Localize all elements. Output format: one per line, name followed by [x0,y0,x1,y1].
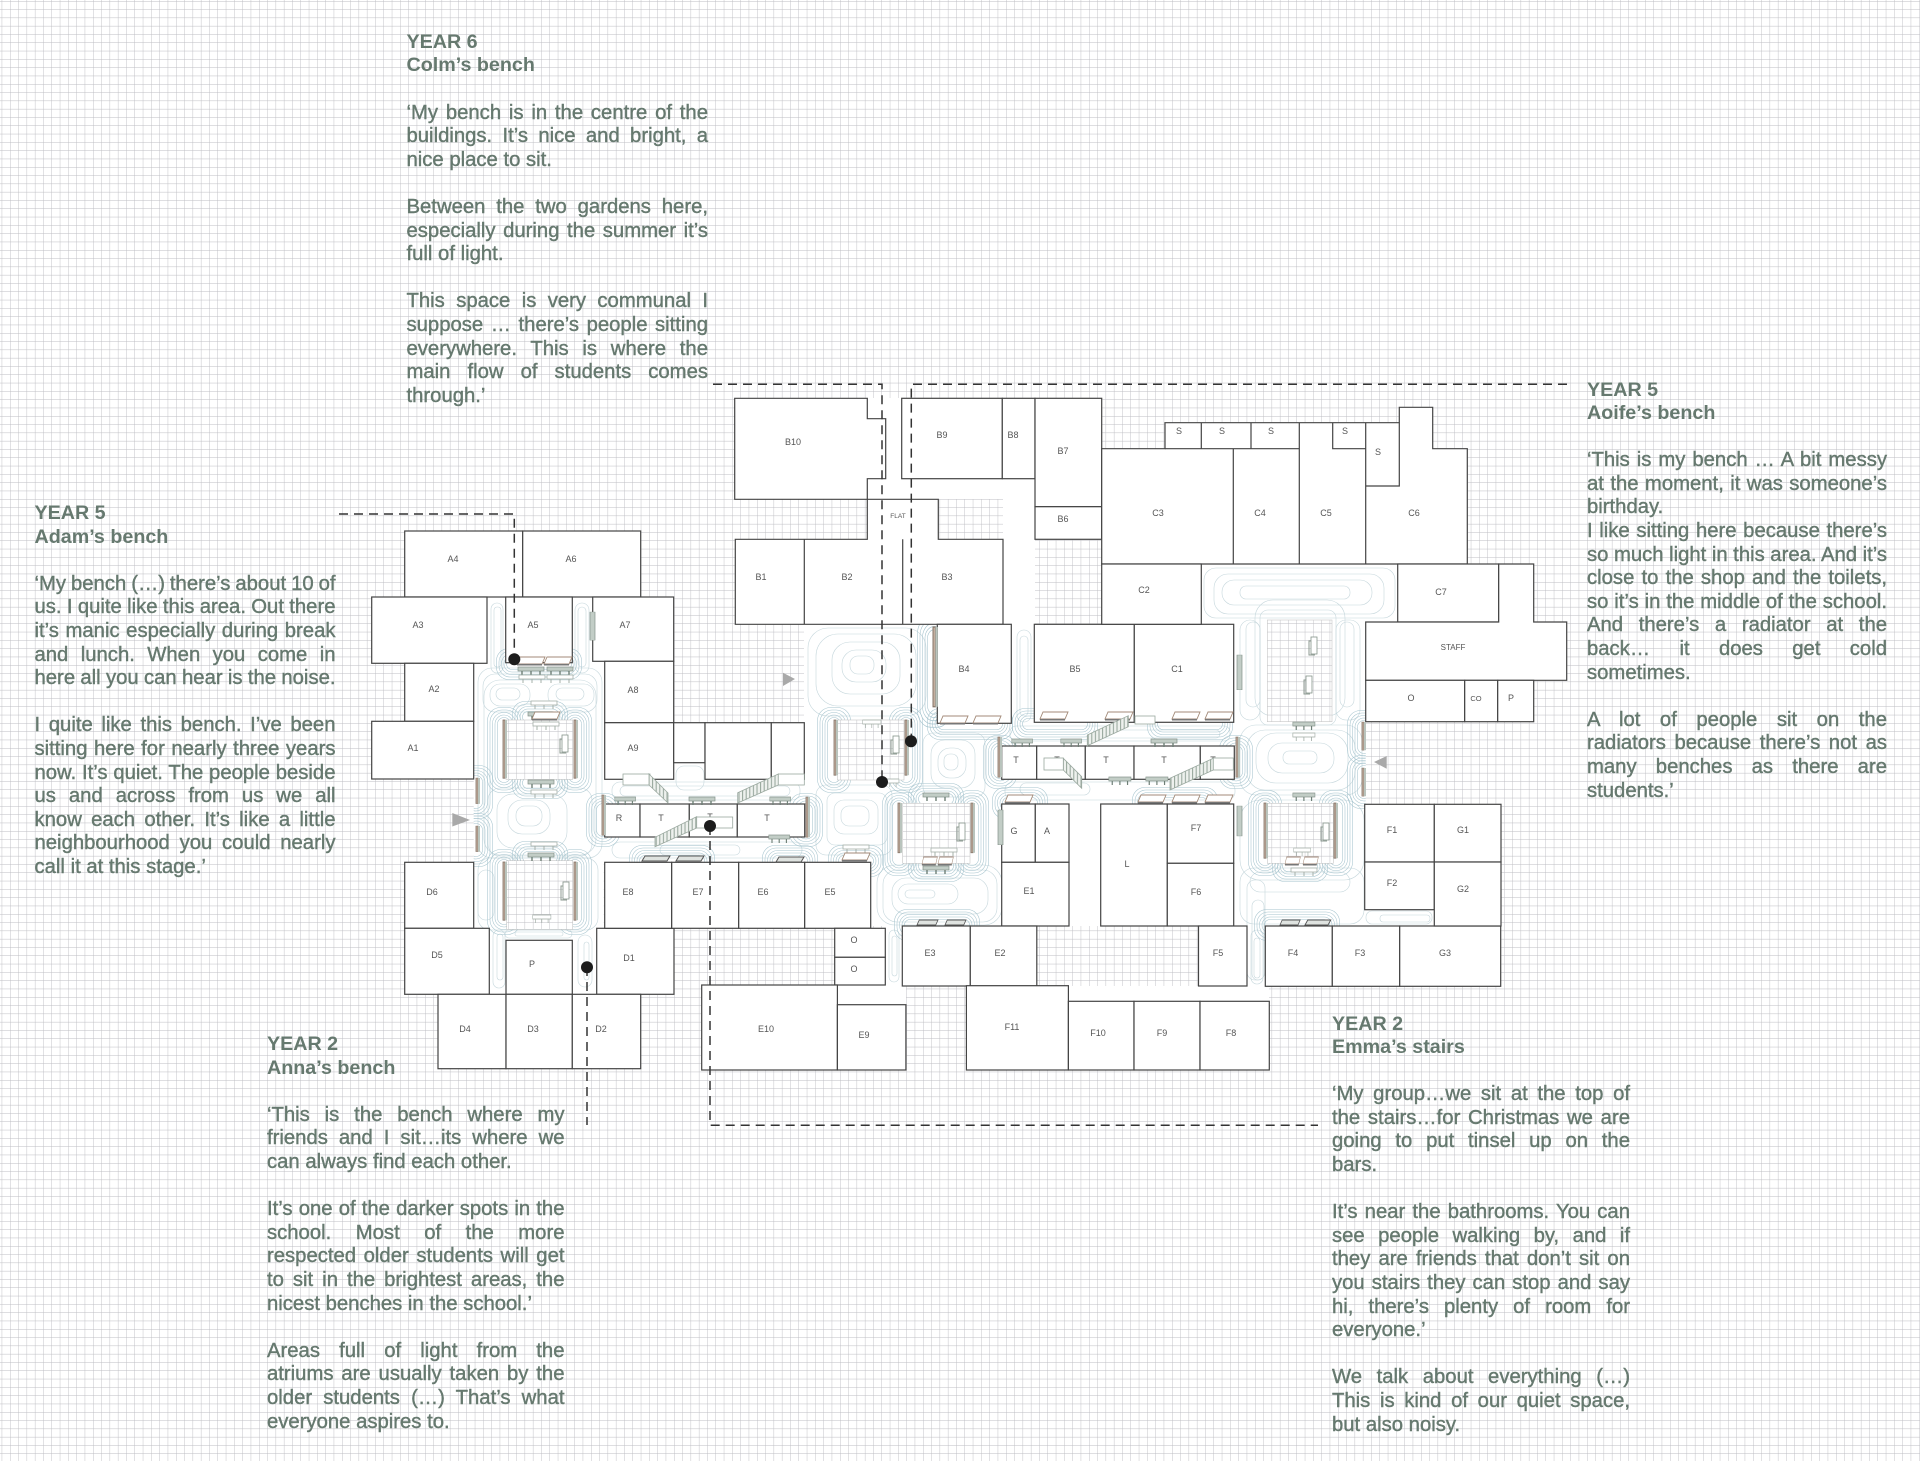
text block: Colm's bench: nice place to sit. [406,149,552,171]
text block: Emma's stairs: the stairs…for Christmas we are [1332,1107,1630,1129]
room labels: A4 [447,554,459,564]
room labels: A6 [565,554,577,564]
room labels: S [1342,426,1348,436]
location dots [508,653,917,973]
rooms: central teaching rows [605,746,1234,926]
room labels: D2 [595,1024,607,1034]
movement contour lines [460,568,1432,988]
room labels: F11 [1005,1022,1019,1032]
text block: Adam's bench: know each other. It’s like a little [34,809,336,831]
text block: Aoife's bench: ‘This is my bench … A bit messy [1587,449,1887,471]
text block: Adam's bench: call it at this stage.’ [34,856,206,878]
text block: Emma's stairs: going to put tinsel up on the [1332,1130,1630,1152]
rooms: A wing [372,531,804,779]
room labels: A3 [412,620,424,630]
room labels: F5 [1213,948,1223,958]
room labels: A1 [407,743,419,753]
text block: Adam's bench: sitting here for nearly three years [34,738,336,760]
room labels: A5 [527,620,539,630]
text block: Anna's bench: respected older students will get [267,1245,564,1267]
text block: Adam's bench: and lunch. When you come in [34,644,336,666]
room labels: T [1013,755,1019,765]
text block: Aoife's bench: back… it does get cold [1587,638,1887,660]
room labels: F6 [1191,887,1201,897]
room labels: G1 [1457,825,1469,835]
text block: Aoife's bench: so much light in this area. And it’s [1587,544,1887,566]
courtyard gardens [506,620,1333,929]
text block: Colm's bench: This space is very communal I [406,290,708,312]
room labels: B10 [785,437,801,447]
text block: Emma's stairs: you stairs they can stop and say [1332,1272,1630,1294]
room labels: A2 [428,684,440,694]
room labels: B5 [1069,664,1081,674]
text block: Aoife's bench: sometimes. [1587,662,1691,684]
text block: Colm's bench: everywhere. This is where the [406,338,708,360]
room labels: T [707,812,713,822]
text block: Anna's bench [266,1033,565,1432]
text block: Colm's bench: through.’ [406,385,485,407]
room labels: E2 [994,948,1006,958]
room labels: T [1054,755,1060,765]
text block: Aoife's bench: many benches as there are [1587,756,1887,778]
text block: Adam's bench: us. I quite like this area. Out there [34,596,336,618]
text block: Colm's bench: full of light. [406,243,503,265]
text block: Aoife's bench: I like sitting here because there’s [1587,520,1887,542]
room labels: B4 [958,664,970,674]
text block: Emma's stairs: but also noisy. [1332,1414,1460,1436]
text block: Colm's bench: YEAR 6 [406,31,478,53]
room labels: S [1176,426,1182,436]
room labels: F10 [1090,1028,1106,1038]
text block: Colm's bench: ‘My bench is in the centre of the [406,102,708,124]
text block: Colm's bench: Colm’s bench [406,54,535,76]
room labels: FLAT [890,513,906,520]
rooms: B wing and flat [735,398,1234,723]
room labels: E7 [692,887,704,897]
room labels: S [1219,426,1225,436]
room labels: C2 [1138,585,1150,595]
room labels: E6 [757,887,769,897]
room labels: A [1044,826,1050,836]
text block: Emma's stairs: everyone.’ [1332,1319,1426,1341]
room labels: T [1210,755,1216,765]
text block: Emma's stairs: It’s near the bathrooms. You can [1332,1201,1630,1223]
dashed leader lines [339,384,1567,1125]
text block: Emma's stairs: ‘My group…we sit at the top of [1332,1083,1630,1105]
room labels: T [1161,755,1167,765]
room labels: E3 [924,948,936,958]
room labels: F8 [1226,1028,1236,1038]
text block: Adam's bench [34,502,336,878]
room labels: C3 [1152,508,1164,518]
room labels: G3 [1439,948,1451,958]
room labels: E9 [858,1030,870,1040]
text block: Colm's bench: buildings. It’s nice and bright, a [406,125,708,147]
room labels: D6 [426,887,438,897]
text block: Emma's stairs: YEAR 2 [1332,1012,1403,1034]
room labels: T [658,813,664,823]
text block: Emma's stairs [1332,1012,1630,1436]
room labels: B3 [941,572,953,582]
text block: Anna's bench: ‘This is the bench where my [267,1104,564,1126]
room labels: E1 [1023,886,1035,896]
room labels: C7 [1435,587,1447,597]
text block: Aoife's bench: YEAR 5 [1587,378,1658,400]
text block: Anna's bench: Areas full of light from the [267,1340,564,1362]
text block: Colm's bench: Between the two gardens here, [406,196,708,218]
text block: Emma's stairs: Emma’s stairs [1332,1036,1465,1058]
text block: Anna's bench: school. Most of the more [267,1222,564,1244]
room labels: B1 [755,572,767,582]
room labels: A9 [627,743,639,753]
text block: Colm's bench: suppose … there’s people sitting [406,314,708,336]
room labels: D1 [623,953,635,963]
room labels: F3 [1355,948,1365,958]
room labels: F2 [1387,878,1397,888]
room labels: P [529,959,535,969]
room labels: G [1010,826,1018,836]
room labels: A8 [627,685,639,695]
text block: Adam's bench: now. It’s quiet. The people beside [34,762,336,784]
text block: Anna's bench: YEAR 2 [267,1033,338,1055]
text block: Emma's stairs: they are friends that don’t sit on [1332,1248,1630,1270]
text block: Aoife's bench: birthday. [1587,496,1663,518]
room labels: E5 [824,887,836,897]
text block: Adam's bench: here all you can hear is the noise. [34,667,336,689]
room labels: F7 [1191,823,1201,833]
room labels: CO [1470,694,1482,703]
text block: Anna's bench: friends and I sit…its where we [267,1127,564,1149]
room labels: O [850,964,858,974]
room labels: D3 [527,1024,539,1034]
room labels: L [1124,859,1130,869]
text block: Emma's stairs: hi, there’s plenty of room for [1332,1296,1630,1318]
room labels: F9 [1157,1028,1167,1038]
room labels: A7 [619,620,631,630]
room labels: T [1103,755,1109,765]
text block: Adam's bench: YEAR 5 [34,502,106,524]
text block: Adam's bench: Adam’s bench [34,526,168,548]
text block: Colm's bench [406,31,708,407]
entrance arrows [452,673,1387,826]
text block: Anna's bench: can always find each other. [267,1151,512,1173]
circulation floor [474,398,1434,1005]
room labels: D5 [431,950,443,960]
text block: Adam's bench: it’s manic especially during break [34,620,336,642]
room labels: O [850,935,858,945]
text block: Anna's bench: atriums are usually taken by the [267,1363,564,1385]
benches: vertical [476,612,1366,920]
room labels: F4 [1288,948,1298,958]
text block: Emma's stairs: We talk about everything (…) [1332,1366,1630,1388]
text block: Adam's bench: ‘My bench (…) there’s about 10 of [34,573,336,595]
text block: Aoife's bench: And there’s a radiator at the [1587,614,1887,636]
room labels [407,426,1514,1040]
text block: Anna's bench: Anna’s bench [267,1057,395,1079]
stairs [623,716,1233,847]
room labels: B8 [1007,430,1019,440]
text block: Adam's bench: neighbourhood you could nearly [34,832,336,854]
room labels: E8 [622,887,634,897]
room labels: E10 [758,1024,774,1034]
text block: Anna's bench: to sit in the brightest areas, the [267,1269,564,1291]
text block: Aoife's bench: close to the shop and the toilets, [1587,567,1887,589]
room labels: O [1407,693,1415,703]
text block: Colm's bench: especially during the summer it’s [406,220,708,242]
text block: Aoife's bench: at the moment, it was someone’s [1587,473,1887,495]
room labels: B7 [1057,446,1069,456]
text block: Aoife's bench: students.’ [1587,780,1674,802]
room labels: B2 [841,572,853,582]
room labels: B9 [936,430,948,440]
room labels: S [1375,447,1381,457]
text block: Anna's bench: everyone aspires to. [267,1410,450,1432]
room labels: P [1508,693,1514,703]
text block: Aoife's bench [1586,378,1888,802]
room labels: C4 [1254,508,1266,518]
rooms: D and E wings [405,862,1037,1070]
room labels: T [764,813,770,823]
room labels: F1 [1387,825,1397,835]
room labels: S [1268,426,1274,436]
text block: Anna's bench: older students (…) That’s what [267,1387,564,1409]
text block: Adam's bench: us and across from us we all [34,785,336,807]
text block: Anna's bench: It’s one of the darker spots in the [267,1198,564,1220]
rooms: C wing and staff [1102,407,1567,722]
text block: Aoife's bench: radiators because there’s not as [1587,732,1887,754]
text block: Anna's bench: nicest benches in the school.’ [267,1293,532,1315]
text block: Colm's bench: main flow of students comes [406,361,708,383]
room labels: R [616,813,623,823]
room labels: B6 [1057,514,1069,524]
room labels: G2 [1457,884,1469,894]
room labels: C5 [1320,508,1332,518]
text block: Emma's stairs: see people walking by, and if [1332,1225,1630,1247]
room labels: C6 [1408,508,1420,518]
rooms: F and G wings [966,804,1501,1070]
text block: Aoife's bench: so it’s in the middle of the school. [1587,591,1887,613]
text block: Aoife's bench: Aoife’s bench [1587,402,1715,424]
text block: Emma's stairs: bars. [1332,1154,1377,1176]
benches: horizontal [517,657,1331,925]
room labels: STAFF [1441,643,1465,652]
text block: Adam's bench: I quite like this bench. I’ve been [34,714,336,736]
room labels: C1 [1171,664,1183,674]
room labels: D4 [459,1024,471,1034]
text block: Emma's stairs: This is kind of our quiet space, [1332,1390,1630,1412]
text block: Aoife's bench: A lot of people sit on the [1587,709,1887,731]
